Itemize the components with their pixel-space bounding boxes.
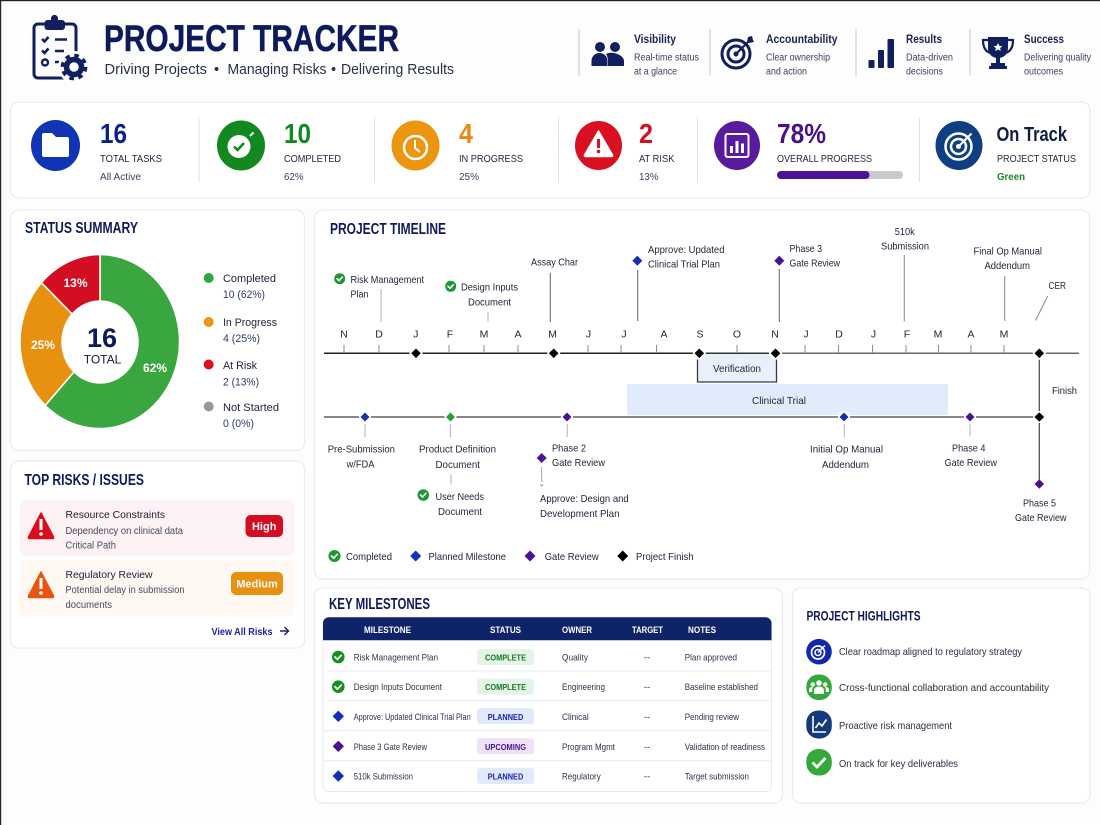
title: PROJECT TRACKER [104, 18, 399, 59]
panel: status summary [10, 210, 304, 450]
KPI: project status: On Track [996, 124, 1068, 146]
timeline legend: Project Finish [636, 551, 694, 563]
donut chart: 62% [143, 361, 167, 375]
row: phase 3 gate review: -- [644, 742, 650, 753]
clinical trial bar [627, 384, 948, 415]
row: phase 3 gate review: Phase 3 Gate Review [354, 742, 427, 753]
heading: top risks: TOP RISKS / ISSUES [24, 472, 144, 489]
header item: results: decisions [906, 66, 943, 78]
upper timeline axis: D [375, 328, 383, 340]
legend: status: 10 (62%) [223, 289, 265, 301]
table header: TARGET [632, 625, 663, 636]
icon: clipboard with gear [34, 15, 90, 83]
upper timeline axis: F [904, 328, 910, 340]
upper timeline axis: J [871, 328, 876, 340]
heading: project highlights: PROJECT HIGHLIGHTS [806, 609, 920, 624]
subtitle: Delivering Results [341, 62, 454, 78]
table header [364, 625, 716, 636]
row: risk management plan: Plan approved [685, 652, 737, 664]
milestone: 510k submission: Submission [881, 240, 929, 252]
row: 510k submission [333, 768, 749, 784]
header item: visibility: at a glance [634, 66, 677, 78]
header item: success [970, 29, 1091, 78]
legend: status: At Risk [223, 360, 257, 372]
KPI: at risk: AT RISK [639, 153, 674, 165]
KPI: in progress: IN PROGRESS [459, 153, 523, 165]
risk: resource constraints [20, 500, 294, 556]
table header: OWNER [562, 625, 592, 636]
milestone: approve updated clinical trial plan: Clinical Trial Plan [648, 258, 720, 270]
highlight: clear roadmap [806, 639, 1023, 664]
row: risk management plan: COMPLETE [485, 652, 526, 662]
header item: results: Results [906, 32, 942, 46]
milestone: product definition document: Document [436, 459, 480, 471]
legend: status: 2 (13%) [223, 376, 259, 388]
milestone: pre-submission: w/FDA [346, 458, 374, 470]
row: approve updated clinical trial plan: Approve: Updated Clinical Trial Plan [354, 712, 471, 723]
milestone: phase 5 gate review: Gate Review [1015, 512, 1067, 524]
upper timeline axis: J [413, 328, 418, 340]
highlight: on track [806, 749, 958, 776]
milestone: phase 3 gate review: Gate Review [790, 258, 840, 270]
KPI: project status [936, 121, 1076, 183]
milestone: approve updated clinical trial plan: Approve: Updated [648, 244, 725, 256]
verification box: Verification [713, 363, 761, 375]
KPI: at risk [575, 118, 674, 183]
milestone: pre-submission: Pre-Submission [328, 444, 395, 456]
row: approve updated clinical trial plan: PLANNED [488, 712, 523, 722]
KPI: in progress [392, 118, 523, 183]
milestone: 510k submission [881, 226, 929, 322]
milestone: CER [1036, 280, 1066, 320]
header item: success: outcomes [1024, 66, 1063, 78]
row: risk management plan [332, 649, 737, 665]
upper timeline axis: O [733, 328, 741, 340]
highlight: collaboration: Cross-functional collaboration and accountability [839, 682, 1050, 694]
table header: MILESTONE [364, 625, 411, 636]
KPI: total tasks: 16 [100, 118, 127, 149]
table header: STATUS [490, 625, 521, 636]
upper timeline axis: A [514, 328, 522, 340]
donut chart [20, 254, 180, 428]
row: design inputs document: -- [644, 682, 650, 693]
upper timeline axis: D [835, 328, 843, 340]
KPI: project status: Green [997, 172, 1025, 183]
legend: status [204, 273, 279, 430]
highlight: clear roadmap: Clear roadmap aligned to regulatory strategy [839, 646, 1023, 658]
donut chart: TOTAL [84, 352, 122, 366]
heading: status summary: STATUS SUMMARY [25, 220, 139, 237]
risk: resource constraints: High [252, 521, 277, 533]
milestone: phase 4 gate review: Phase 4 [952, 442, 986, 454]
milestone: phase 5 gate review: Phase 5 [1023, 498, 1056, 510]
panel: project highlights [792, 588, 1090, 803]
milestone: initial op manual addendum [810, 424, 883, 471]
legend: status: 0 (0%) [223, 418, 254, 430]
progress bar [777, 171, 903, 179]
row: 510k submission: Target submission [685, 772, 749, 782]
upper timeline axis: N [771, 328, 779, 340]
KPI: in progress: 4 [459, 118, 473, 149]
KPI: total tasks: TOTAL TASKS [100, 153, 162, 165]
KPI: completed: COMPLETED [284, 153, 341, 165]
milestone: product definition document [419, 424, 496, 484]
legend: status: In Progress [223, 317, 277, 329]
milestone: phase 4 gate review: Gate Review [944, 457, 997, 469]
milestone: initial op manual addendum: Addendum [822, 459, 869, 471]
milestone: approve design and development plan [540, 493, 629, 520]
subtitle: Driving Projects [104, 62, 207, 78]
KPI: overall progress: OVERALL PROGRESS [777, 153, 872, 165]
timeline legend: Gate Review [545, 551, 599, 563]
milestone: product definition document: Product Definition [419, 444, 496, 456]
upper timeline axis: M [934, 328, 942, 340]
milestone: phase 3 gate review: Phase 3 [790, 243, 822, 255]
row: risk management plan: Quality [562, 652, 588, 664]
milestone: final op manual addendum [974, 246, 1042, 321]
KPI: completed [217, 118, 341, 183]
panel: key milestones [314, 588, 782, 803]
donut chart: 13% [63, 276, 88, 290]
milestone: phase 2 gate review: Phase 2 [552, 442, 586, 454]
row: 510k submission: -- [644, 772, 650, 782]
header item: visibility: Visibility [634, 32, 676, 46]
clinical trial bar: Clinical Trial [752, 395, 806, 407]
donut chart: 16 [87, 323, 117, 353]
row: phase 3 gate review [333, 738, 765, 754]
row: design inputs document: COMPLETE [485, 682, 526, 692]
KPI: completed: 62% [284, 172, 304, 183]
header [34, 15, 1091, 83]
KPI: total tasks [31, 118, 162, 183]
KPI: overall progress: 78% [777, 118, 826, 149]
row: approve updated clinical trial plan: -- [644, 712, 650, 723]
row: risk management plan: Risk Management Plan [354, 652, 438, 664]
milestone: approve design and development plan: Approve: Design and [540, 493, 629, 505]
milestone: CER: CER [1048, 280, 1066, 292]
legend: status: Completed [223, 273, 276, 285]
milestone: user needs document: Document [438, 506, 482, 518]
timeline legend: Planned Milestone [428, 551, 506, 563]
heading: project timeline: PROJECT TIMELINE [330, 221, 446, 238]
upper timeline axis: M [1000, 328, 1008, 340]
milestone: phase 2 gate review: Gate Review [552, 457, 605, 469]
milestone: 510k submission: 510k [895, 226, 915, 238]
row: phase 3 gate review: Validation of readiness [685, 742, 765, 753]
row: risk management plan: -- [644, 652, 650, 664]
row: design inputs document: Baseline established [685, 682, 758, 693]
milestone: phase 5 gate review [1015, 479, 1067, 524]
milestone: design inputs document: Document [468, 296, 511, 308]
row: design inputs document: Design Inputs Document [354, 682, 442, 693]
upper timeline axis: J [803, 328, 809, 340]
row: phase 3 gate review: Program Mgmt [562, 742, 615, 753]
highlight: collaboration [806, 674, 1050, 700]
panel: top risks [10, 461, 304, 648]
timeline legend: Completed [346, 551, 392, 563]
risk: regulatory review: documents [66, 600, 112, 611]
heading: key milestones: KEY MILESTONES [329, 596, 430, 613]
upper timeline axis: S [696, 328, 704, 340]
donut chart: 25% [31, 338, 55, 352]
row: approve updated clinical trial plan: Pending review [685, 712, 739, 723]
risk: resource constraints: Dependency on clinical data [66, 526, 183, 537]
risk: regulatory review: Potential delay in submission [66, 585, 184, 596]
risk: resource constraints: Resource Constraints [66, 509, 165, 521]
milestone: user needs document [418, 489, 484, 518]
KPI: in progress: 25% [459, 172, 479, 183]
KPI: project status: PROJECT STATUS [997, 153, 1076, 165]
lower timeline axis [324, 347, 1077, 484]
milestone: approve updated clinical trial plan [632, 244, 725, 321]
header item: accountability: Accountability [766, 32, 838, 46]
upper timeline axis [324, 328, 1079, 360]
milestone: risk management plan: Risk Management [350, 274, 424, 286]
milestone: final op manual addendum: Addendum [984, 260, 1030, 272]
milestone: final op manual addendum: Final Op Manual [974, 246, 1042, 258]
table header: NOTES [688, 625, 716, 636]
header item: visibility [578, 29, 699, 78]
highlight: risk management: Proactive risk management [839, 720, 952, 732]
row: 510k submission: 510k Submission [354, 772, 413, 782]
upper timeline axis: A [660, 328, 668, 340]
upper timeline axis: J [621, 328, 627, 340]
KPI: completed: 10 [284, 118, 311, 149]
row: approve updated clinical trial plan: Clinical [562, 712, 589, 723]
timeline legend [328, 550, 694, 563]
highlight: risk management [806, 710, 952, 738]
panel: project timeline [314, 210, 1090, 579]
header item: results [856, 29, 953, 78]
header item: accountability: and action [766, 66, 807, 78]
header item: accountability: Clear ownership [766, 52, 830, 64]
milestones table [323, 617, 772, 792]
link: view all risks: View All Risks [212, 626, 273, 638]
upper timeline axis: J [586, 328, 591, 340]
KPI: at risk: 13% [639, 172, 659, 183]
milestone: phase 4 gate review [944, 424, 997, 469]
milestone: assay char: Assay Char [531, 256, 578, 268]
milestone: design inputs document: Design Inputs [461, 282, 518, 294]
row: 510k submission: Regulatory [562, 772, 601, 782]
legend: status: 4 (25%) [223, 333, 260, 345]
risk: resource constraints: Critical Path [66, 540, 116, 552]
risk: regulatory review [20, 560, 294, 616]
row: phase 3 gate review: UPCOMING [485, 742, 526, 752]
upper timeline axis: A [967, 328, 975, 340]
upper timeline axis: N [340, 328, 348, 340]
row: approve updated clinical trial plan [333, 708, 739, 724]
subtitle: • [331, 62, 336, 78]
milestone: design inputs document [445, 281, 518, 322]
subtitle: • [214, 62, 219, 78]
panel: KPI strip [10, 102, 1090, 198]
legend: status: Not Started [223, 402, 279, 414]
milestone: risk management plan [334, 273, 424, 322]
row: design inputs document [332, 679, 758, 695]
milestone: phase 2 gate review [537, 424, 605, 486]
row: 510k submission: PLANNED [488, 772, 523, 782]
upper timeline axis: M [548, 328, 557, 340]
milestone: phase 3 gate review [774, 243, 840, 322]
risk: regulatory review: Medium [236, 578, 278, 590]
header item: results: Data-driven [906, 52, 953, 64]
lower timeline axis: Finish [1052, 385, 1077, 397]
header item: success: Success [1024, 32, 1064, 46]
upper timeline axis: M [480, 328, 488, 340]
milestone: risk management plan: Plan [350, 288, 369, 300]
KPI: total tasks: All Active [100, 172, 141, 183]
header item: accountability [710, 29, 838, 78]
verification box [698, 353, 776, 382]
subtitle [104, 62, 454, 78]
risk: regulatory review: Regulatory Review [66, 569, 153, 581]
header item: success: Delivering quality [1024, 52, 1091, 64]
row: design inputs document: Engineering [562, 682, 605, 693]
milestone: assay char [531, 256, 578, 322]
milestone: pre-submission [328, 424, 395, 470]
milestone: initial op manual addendum: Initial Op Manual [810, 444, 883, 456]
subtitle: Managing Risks [228, 62, 326, 78]
upper timeline axis: F [447, 328, 453, 340]
KPI: at risk: 2 [639, 118, 653, 149]
milestone: user needs document: User Needs [436, 491, 484, 503]
header item: visibility: Real-time status [634, 52, 699, 64]
milestone: approve design and development plan: Development Plan [540, 508, 620, 520]
KPI: overall progress [714, 118, 903, 179]
highlight: on track: On track for key deliverables [839, 758, 958, 770]
